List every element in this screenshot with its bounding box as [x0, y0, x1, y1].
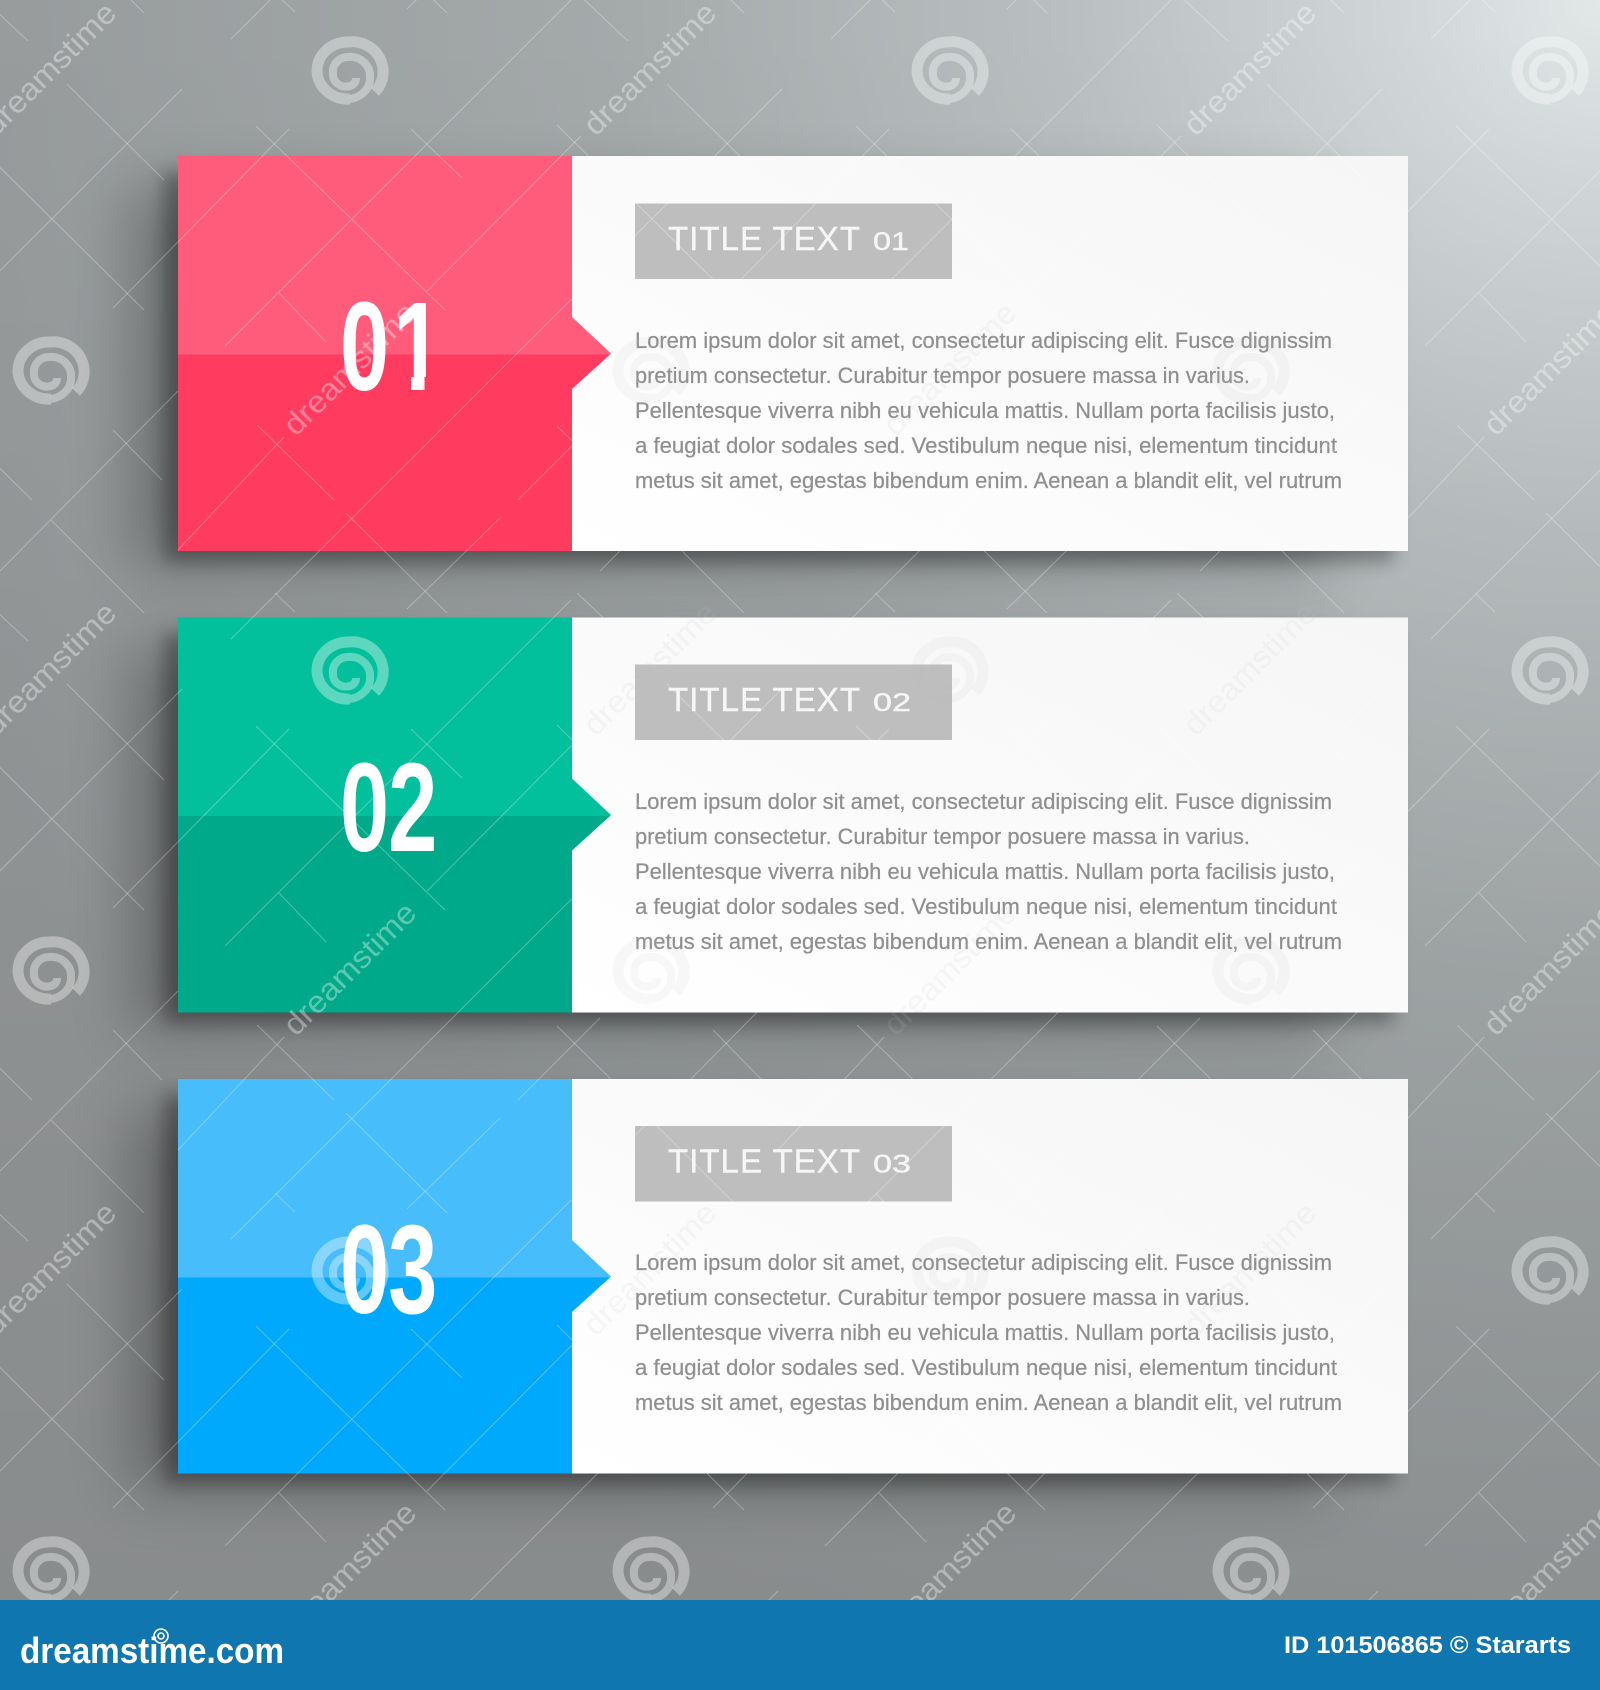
- body text 01: Pellentesque viverra nibh eu vehicula mattis. Nullam porta facilisis justo,: [635, 398, 1335, 423]
- number 03: 3: [388, 1201, 437, 1341]
- text card 03: [572, 1079, 1408, 1474]
- body text 02: a feugiat dolor sodales sed. Vestibulum neque nisi, elementum tincidunt: [635, 894, 1338, 919]
- body text 03: Lorem ipsum dolor sit amet, consectetur adipiscing elit. Fusce dignissim: [635, 1250, 1332, 1275]
- body text 03: metus sit amet, egestas bibendum enim. Aenean a blandit elit, vel rutrum: [635, 1390, 1342, 1415]
- footer bar: [0, 1600, 1600, 1690]
- title tag 03: TITLE TEXT: [668, 1142, 860, 1180]
- icon: small spiral: [154, 1629, 168, 1643]
- body text 02: [635, 789, 1342, 954]
- body text 02: pretium consectetur. Curabitur tempor posuere massa in varius.: [635, 824, 1250, 849]
- watermark: diagonal line network, spirals and brand text: dreamstime: [576, 595, 723, 742]
- title tag 02: [635, 664, 952, 740]
- body text 02: Pellentesque viverra nibh eu vehicula mattis. Nullam porta facilisis justo,: [635, 859, 1335, 884]
- watermark: diagonal line network, spirals and brand text: dreamstime: [276, 895, 423, 1042]
- body text 02: Lorem ipsum dolor sit amet, consectetur adipiscing elit. Fusce dignissim: [635, 789, 1332, 814]
- title tag 02: TITLE TEXT: [668, 681, 860, 718]
- body text 03: pretium consectetur. Curabitur tempor posuere massa in varius.: [635, 1285, 1250, 1310]
- number 01: 1: [393, 278, 442, 418]
- title tag 01: [635, 204, 952, 279]
- colour block 02: [178, 618, 611, 1012]
- body text 03: a feugiat dolor sodales sed. Vestibulum neque nisi, elementum tincidunt: [635, 1355, 1338, 1380]
- body text 01: Lorem ipsum dolor sit amet, consectetur adipiscing elit. Fusce dignissim: [635, 328, 1332, 353]
- watermark: diagonal line network, spirals and brand text: dreamstime: [876, 895, 1023, 1042]
- panel: step 02: [178, 618, 1408, 1012]
- title tag 01: 01: [873, 228, 909, 256]
- title tag 03: [635, 1126, 952, 1202]
- body text 01: pretium consectetur. Curabitur tempor posuere massa in varius.: [635, 363, 1250, 388]
- watermark: diagonal line network, spirals and brand text: dreamstime: [576, 1195, 723, 1342]
- number 02: 2: [388, 739, 437, 879]
- watermark: diagonal line network, spirals and brand text: dreamstime: [276, 295, 423, 442]
- number 02: 0: [340, 739, 389, 879]
- watermark: diagonal line network, spirals and brand text: dreamstime: [276, 1495, 423, 1642]
- text card 02: [572, 618, 1408, 1012]
- number 01: 0: [340, 278, 389, 418]
- body text 01: [635, 328, 1342, 493]
- watermark: diagonal line network, spirals and brand text: dreamstime: [1176, 595, 1323, 742]
- body text 02: metus sit amet, egestas bibendum enim. Aenean a blandit elit, vel rutrum: [635, 929, 1342, 954]
- footer image id and credit: ID 101506865 © Stararts: [1284, 1632, 1571, 1659]
- body text 03: [635, 1250, 1342, 1415]
- colour block 01: [178, 156, 611, 551]
- title tag 03: 03: [873, 1150, 911, 1178]
- number 01 foot mask: [398, 377, 446, 393]
- panel: step 01: [178, 156, 1408, 551]
- panel shadows: [130, 172, 1394, 1492]
- title tag 01: TITLE TEXT: [668, 220, 860, 257]
- body text 01: metus sit amet, egestas bibendum enim. Aenean a blandit elit, vel rutrum: [635, 468, 1342, 493]
- watermark: diagonal line network, spirals and brand text: dreamstime: [576, 0, 723, 142]
- body text 03: Pellentesque viverra nibh eu vehicula mattis. Nullam porta facilisis justo,: [635, 1320, 1335, 1345]
- footer logo text: dreamstime.com: [20, 1630, 284, 1671]
- text card 01: [572, 156, 1408, 551]
- body text 01: a feugiat dolor sodales sed. Vestibulum neque nisi, elementum tincidunt: [635, 433, 1338, 458]
- colour block 03: [178, 1079, 611, 1474]
- title tag 02: 02: [873, 689, 911, 717]
- watermark: diagonal line network, spirals and brand text: dreamstime: [876, 1495, 1023, 1642]
- watermark: diagonal line network, spirals and brand text: dreamstime: [1176, 1195, 1323, 1342]
- watermark: diagonal line network, spirals and brand text: dreamstime: [876, 295, 1023, 442]
- watermark: diagonal line network, spirals and brand text: dreamstime: [1176, 0, 1323, 142]
- panel: step 03: [178, 1079, 1408, 1474]
- number 03: 0: [340, 1201, 389, 1341]
